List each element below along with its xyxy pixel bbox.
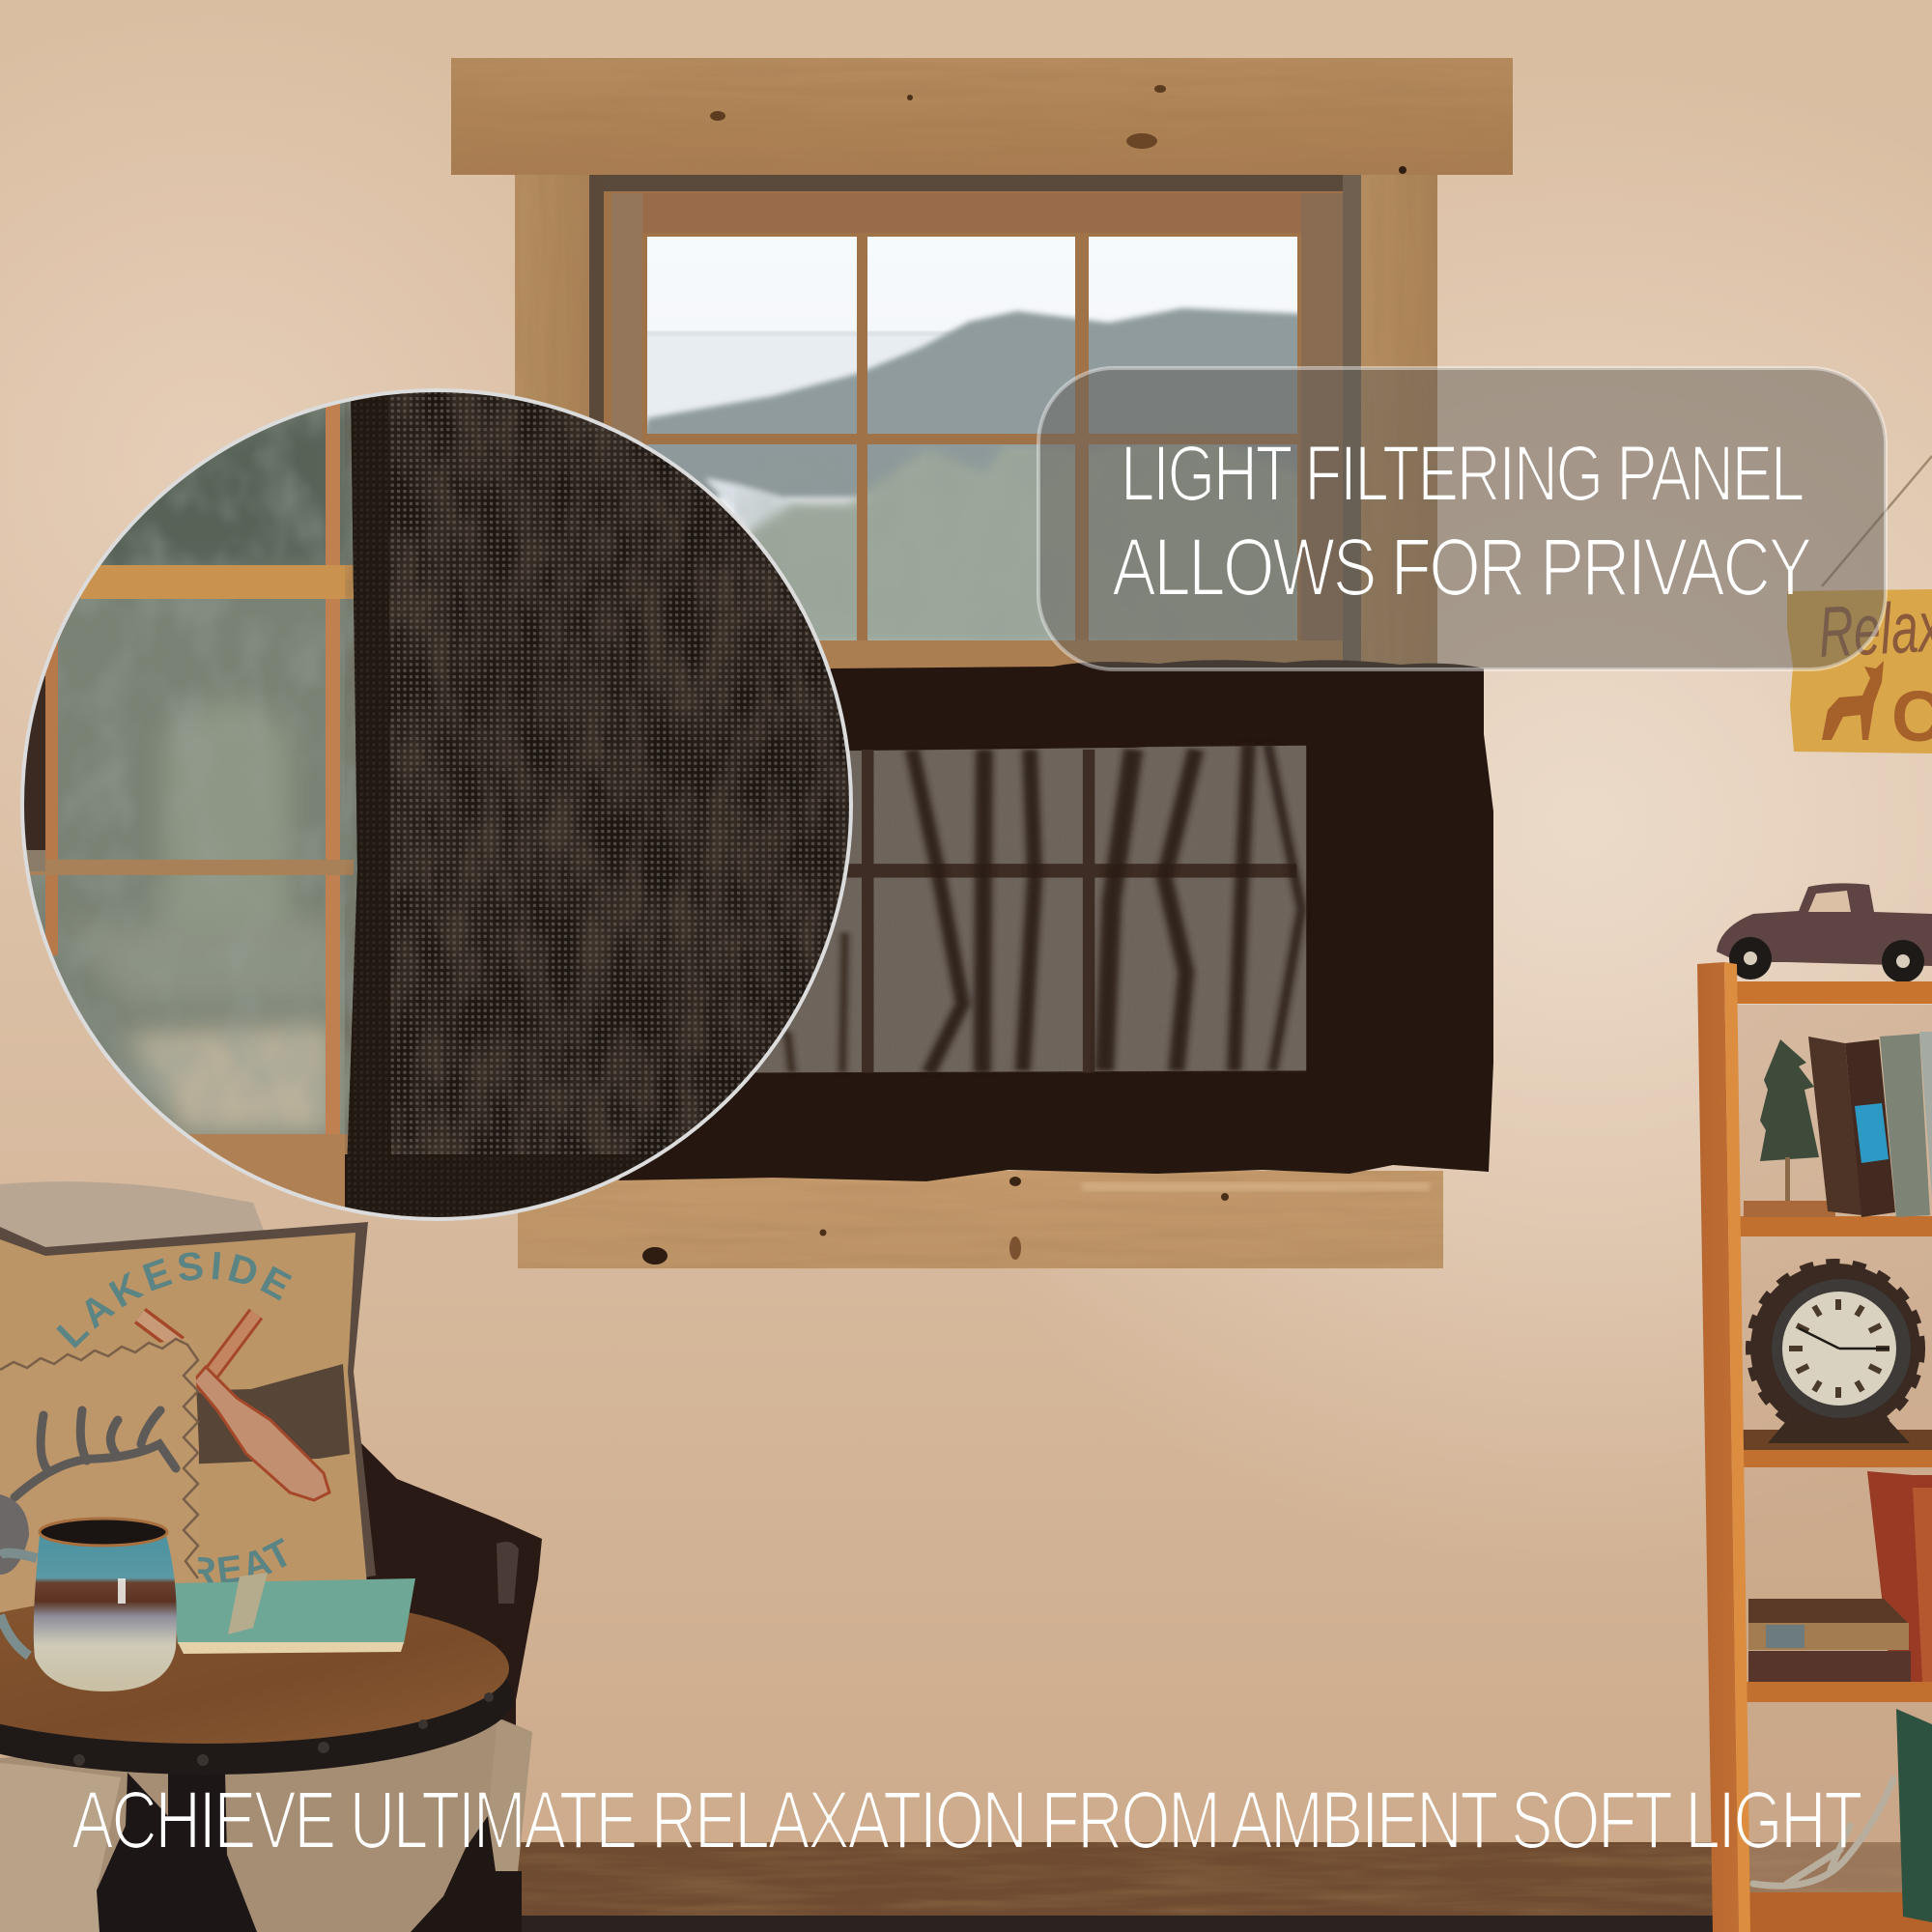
table top [0,1593,514,1775]
top rail [638,193,1314,233]
left stile [611,193,642,676]
canoe band [184,1364,350,1464]
chair [58,1440,542,1768]
sash frame [604,191,1343,671]
tree ornament [1744,1039,1835,1217]
throw blanket under table [0,1719,532,1932]
header board [451,58,1513,175]
right stile [1301,193,1343,676]
open book [172,1573,415,1654]
chair base under throw [411,1816,522,1932]
elk antlers [14,1410,176,1497]
casing right [1361,175,1437,687]
sign string [1822,456,1932,586]
window recess [585,175,1366,677]
sheer shadows of window muntins [802,750,1296,1072]
books top [1808,1032,1932,1217]
top band overlap [850,724,1306,751]
lens outdoor view [0,386,367,1227]
window view [638,232,1314,647]
mug [0,1519,177,1691]
truck [1717,883,1932,982]
casing left [515,175,589,687]
wall sign [1787,456,1932,756]
zoom lens circle [0,386,869,1227]
small elk pillow [0,1337,199,1613]
green book [1896,1709,1932,1922]
throw blanket on chair back [0,1181,265,1265]
elk head [0,1494,29,1575]
paddle handle back [198,1314,256,1391]
pillow zigzag edge [0,1339,198,1578]
paddle handle left [140,1316,179,1345]
large pillow [0,1222,376,1582]
curtain [618,660,1493,1181]
window [585,175,1366,677]
shelf upright [1697,962,1750,1932]
table pedestal [97,1773,257,1932]
sign deer [1822,661,1884,740]
clock [1750,1264,1920,1443]
shelf back shade [1737,1005,1932,1932]
sill board [518,1171,1443,1268]
lens bear sign [0,630,45,871]
curtain sheer window area [744,724,1306,1072]
pillow text LAKESIDE: LAKESIDE [56,1252,292,1349]
bottom rail [604,640,1343,671]
shelf boards [1737,981,1932,1932]
callout panel [1038,368,1886,669]
pillow text RETREAT: REAT [198,1538,287,1582]
paddle front [193,1367,329,1500]
antler [1753,1779,1893,1886]
lens window frame [24,396,357,1211]
red book [1867,1471,1932,1682]
lens fabric [345,386,869,1227]
baseboard and floor [512,1842,1932,1932]
stacked books [1748,1599,1911,1682]
shelf unit [1697,883,1932,1932]
fabric folds [787,744,1301,1072]
